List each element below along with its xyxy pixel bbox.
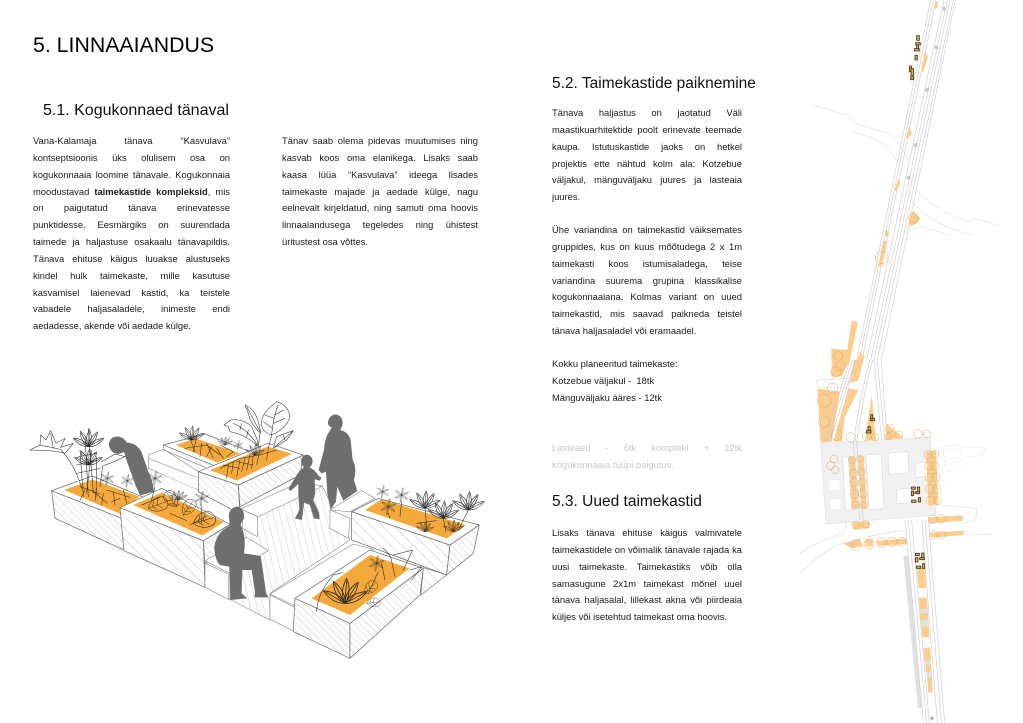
text block: 5.3: tänava haljasalal, lillekast akna või piirdeaia [552,594,742,605]
road end node [930,717,934,720]
text block: 5.2 second paragraph: kogukonnaaiana. Kolmas variant on uued [552,291,742,302]
planter: left [52,476,143,550]
plants: rear right planter [220,402,293,478]
text block: 5.1 column one: punktidesse. Eesmärgiks on suurendada [33,219,230,230]
text block: 5.1 column one: on paigutatud tänava erinevatesse [33,202,230,213]
text block: 5.1 column two: taimekaste majade ja aedade külge, nagu [282,186,478,197]
text block: 5.2 second paragraph: gruppides, kus on kuus mõõtudega 2 x 1m [552,241,742,252]
text block: 5.1 column two: Tänav saab olema pidevas muutumises ning [282,135,478,146]
seat: centre back [240,481,322,537]
side paths [813,105,1000,236]
heading: 5.2: 5.2. Taimekastide paiknemine [552,75,756,92]
buildings [817,378,929,510]
text block: 5.1 column one [33,135,230,331]
text block: 5.1 column one: Vana-Kalamaja tänava “Kasvulava” [33,135,230,146]
map: lower section [800,360,993,723]
text block: kindergarten note: kogukonnaaia tüüpi paigutus. [552,459,674,470]
planter: centre left [120,488,233,587]
text block: 5.2 first paragraph: kaupa. Istutuskastide jaoks on hetkel [552,141,742,152]
text block: planned planter counts: Kokku planeeritud taimekaste: [552,358,678,369]
planter markers: kindergarten [915,553,925,568]
text block: 5.2 second paragraph: Ühe variandina on taimekastid väiksemates [552,224,742,235]
map: upper section [813,0,1000,360]
seat: front [270,544,373,632]
heading: 5.1: 5.1. Kogukonnaed tänaval [43,102,229,119]
text block: 5.1 column one: kasvamisel laienevad kastid, ka teistele [33,287,230,298]
text block: 5.1 column two: kaasa lüüa “Kasvulava” ideega lisades [282,169,478,180]
text block: 5.2 second paragraph [552,224,742,336]
text block: 5.1 column two: üritustest osa võttes. [282,236,368,247]
text block: 5.2 first paragraph: Tänava haljastus on jaotatud Väli [552,107,742,118]
plants [30,402,486,612]
orange green areas [817,360,964,693]
green areas [831,2,938,360]
plants: left planter [30,428,134,505]
road lines [857,0,955,360]
road lines [823,360,945,723]
seat: left [205,537,268,599]
silhouette: bending person [109,437,154,495]
text block: 5.2 second paragraph: taimekasti koos istumisaladega, teise [552,258,742,269]
rear seat [148,449,198,495]
text block: 5.2 first paragraph: juures. [552,191,580,202]
text block: 5.1 column two [282,135,478,247]
text block: 5.1 column one: aedadesse, akende või aedade külge. [33,320,191,331]
planter: rear [163,434,250,472]
grey nodes [907,7,946,180]
text block: planned planter counts: Mänguväljaku ääres - 12tk [552,392,662,403]
plants: front planter [317,548,422,612]
text block: 5.1 column one: kindel hulk taimekaste, mille kasutuse [33,270,230,281]
heading: 5.3: 5.3. Uued taimekastid [552,493,702,510]
text block: 5.1 column one: moodustavad taimekastide kompleksid, mis [33,186,230,197]
planter: rear right [198,443,303,514]
text block: 5.3: taimekastidele on võimalik tänavale rajada ka [552,544,742,555]
text block: 5.3: uusi taimekaste. Taimekastiks võib olla [552,561,742,572]
text block: 5.2 first paragraph: maastikuarhitektide poolt erinevate teemade [552,124,742,135]
text block: 5.1 column two: linnaaiandusega tegeledes ning ühistest [282,219,478,230]
seat: right small [330,491,375,538]
text block: planned planter counts: Kotzebue väljakul - 18tk [552,375,654,386]
planter markers: Kotzebue [866,415,875,433]
grey strips [903,555,932,708]
planter: front [293,550,447,658]
silhouette: woman [319,414,357,509]
text block: 5.1 column two: eelnevalt kirjeldatud, ning samuti oma hoovis [282,202,478,213]
plants: rear planter [178,426,243,458]
text block: 5.1 column one: kontseptsioonis üks olulisem osa on [33,152,230,163]
text block: 5.3: samasugune 2x1m taimekast mõnel uuel [552,578,742,589]
text block: 5.1 column one: Tänava ehituse käigus luuakse alustuseks [33,253,230,264]
silhouette: sitting person [214,507,269,600]
text block: 5.1 column one: kogukonnaaia loomine tänavale. Kogukonnaia [33,169,230,180]
text block: 5.1 column one: taimede ja haljastuse osakaalu tänavapildis. [33,236,230,247]
text block: 5.3: Lisaks tänava ehituse käigus valmivatele [552,527,742,538]
contours [938,445,986,472]
plaza [821,437,936,524]
plants: centre left planter [142,471,218,531]
text block: 5.2 first paragraph: väljakul, mänguväljaku juures ja lasteaia [552,174,742,185]
tree outlines [834,214,918,360]
planter: right [352,498,479,575]
side paths [800,505,993,573]
text block: kindergarten note [552,442,742,470]
text block: 5.2 second paragraph: variandina suurema grupina klassikalise [552,275,742,286]
text block: 5.1 column one: vabadele haljasaladele, inimeste endi [33,303,230,314]
plants: right planter [376,485,486,533]
deck [205,485,350,620]
text block: 5.3 [552,527,742,622]
text block: 5.3: küljes või isetehtud taimekast oma hoovis. [552,611,727,622]
text block: 5.2 second paragraph: taimekastid, mis saavad paikneda teistel [552,308,742,319]
tree outlines [818,361,946,550]
title: 5. LINNAAIANDUS [33,33,214,57]
silhouette: child [288,455,321,520]
text block: kindergarten note: Lasteaed - 6tk komplekt + 12tk [552,442,742,453]
planter markers: north [909,36,920,80]
text block: 5.2 first paragraph [552,107,742,202]
text block: planned planter counts [552,358,678,403]
text block: 5.2 first paragraph: projektis ette nähtud kolm ala: Kotzebue [552,158,742,169]
text block: 5.2 second paragraph: tänava haljasaladel või eramaadel. [552,325,696,336]
text block: 5.1 column two: kasvab koos oma elanikega. Lisaks saab [282,152,478,163]
planter markers: playground [911,487,921,502]
